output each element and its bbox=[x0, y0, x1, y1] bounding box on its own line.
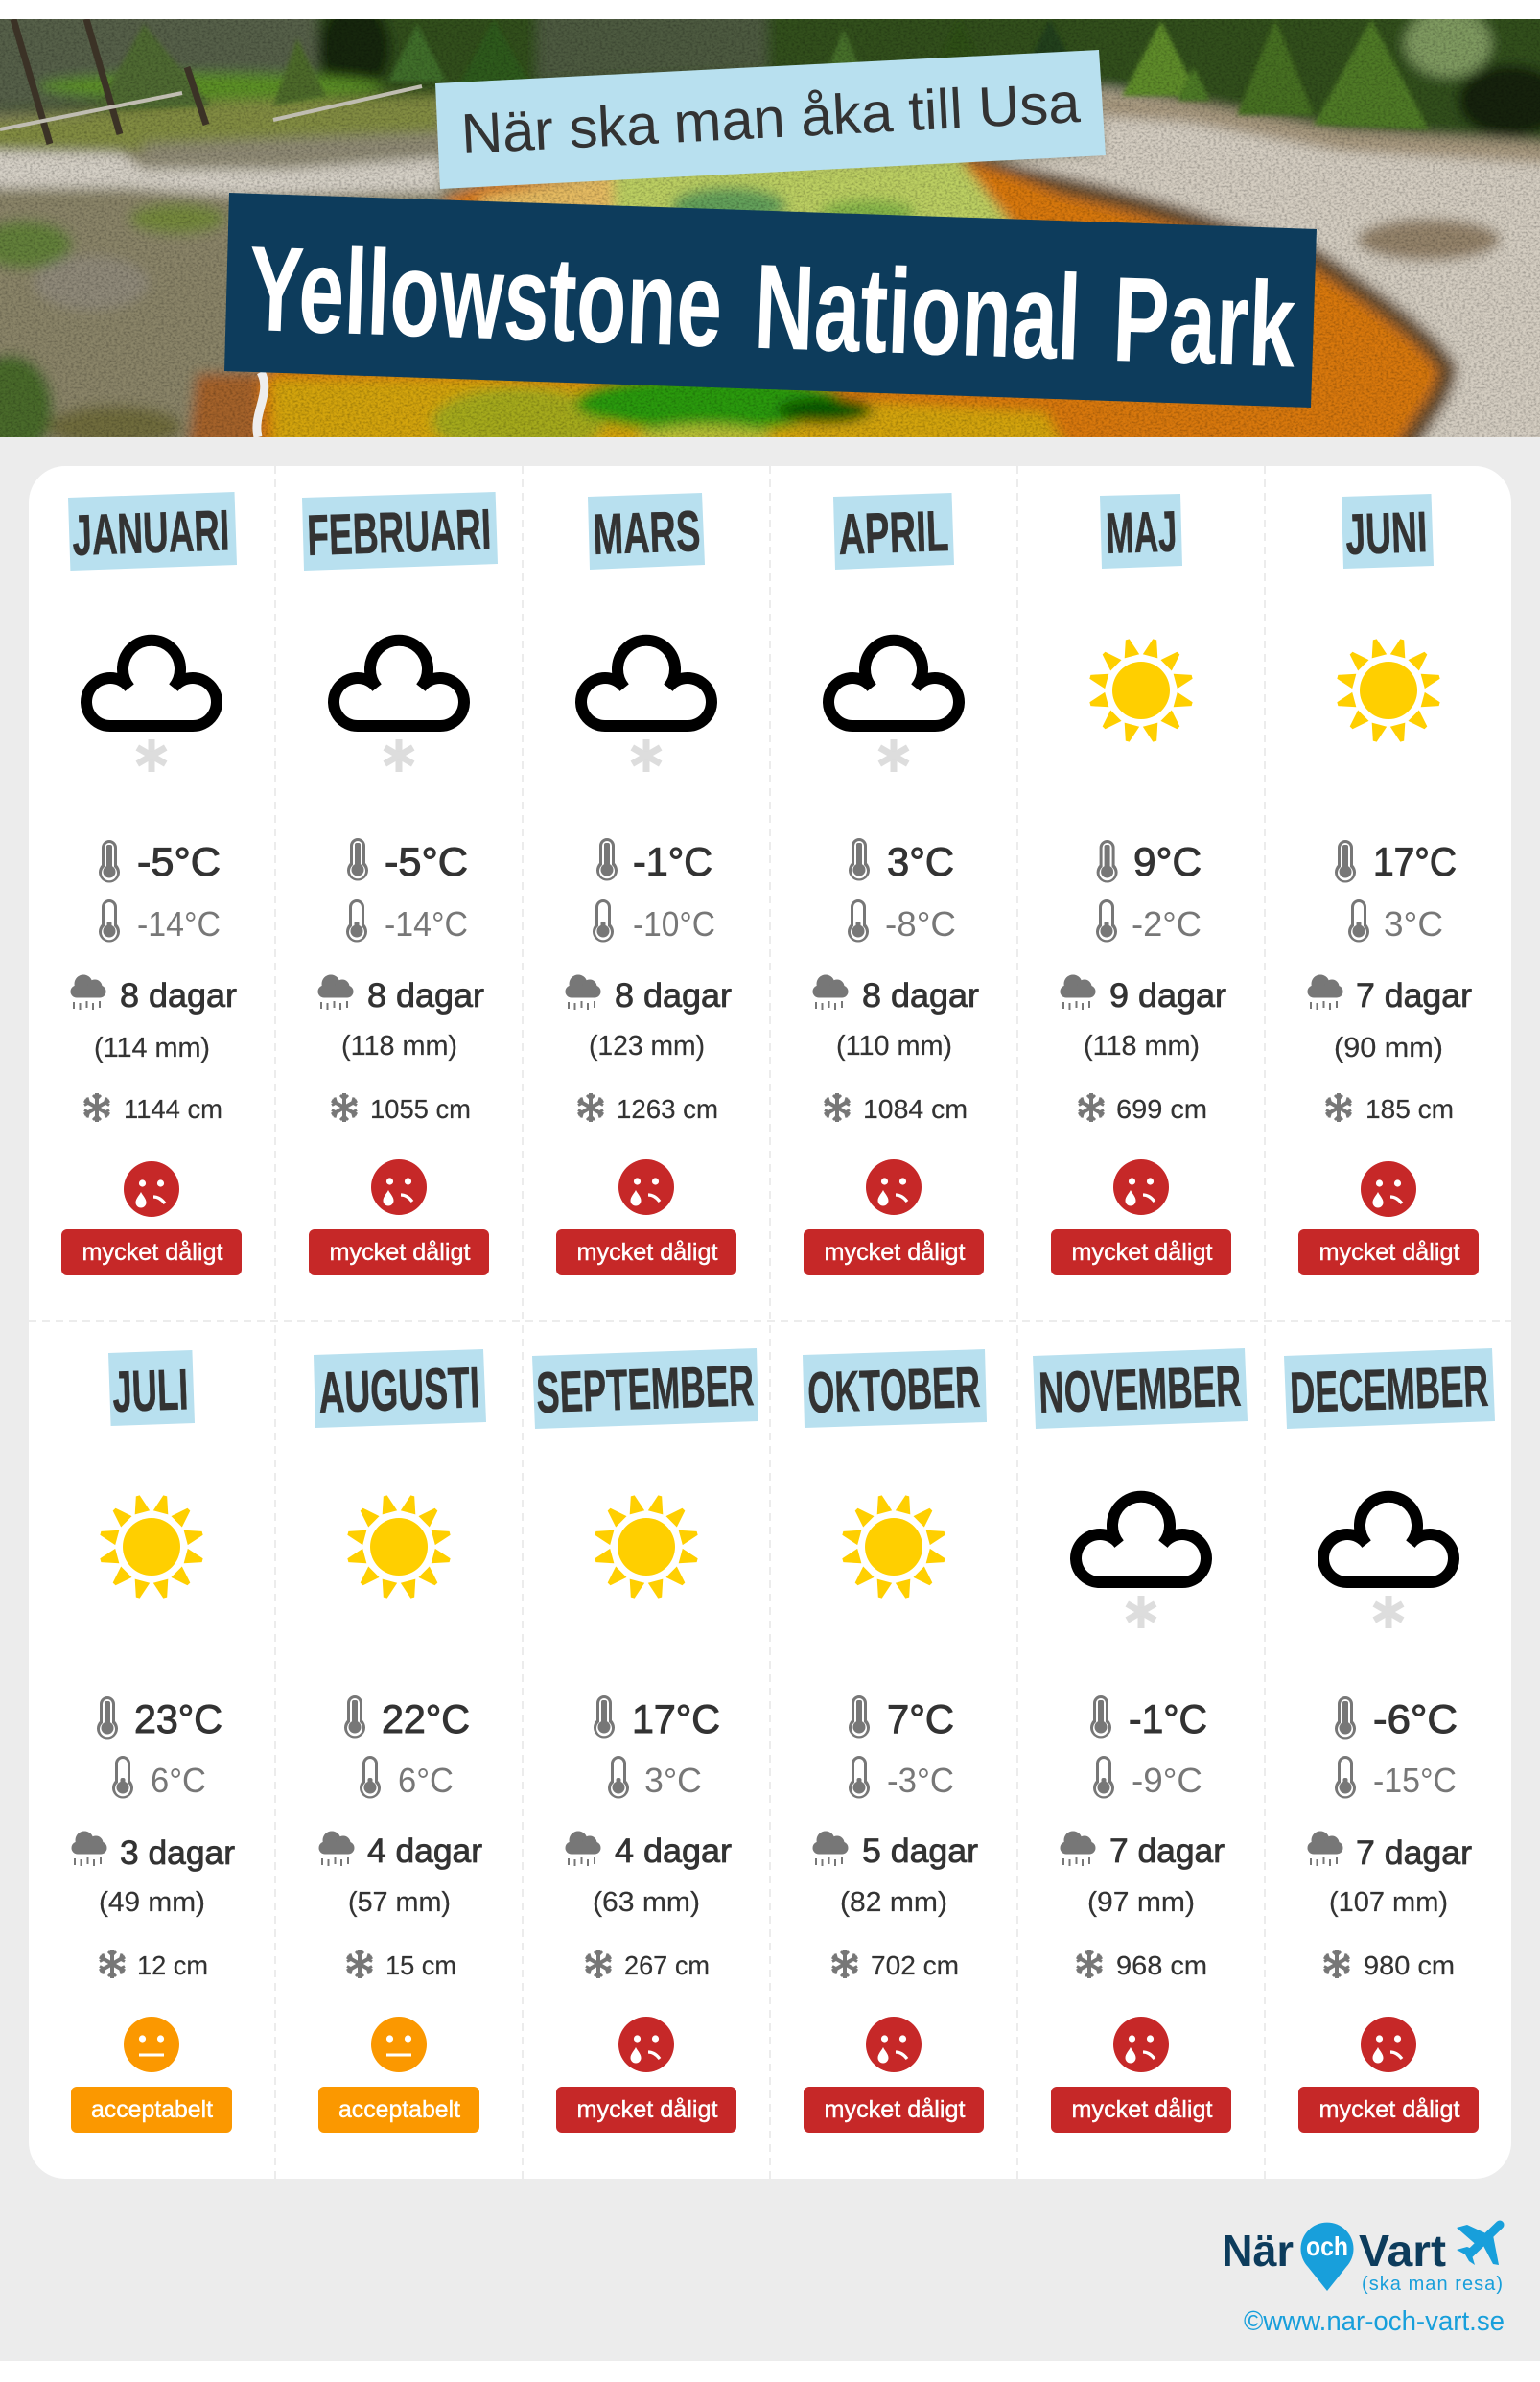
header photo: Yellowstone hot spring bbox=[0, 0, 1540, 460]
rating badge: mycket dåligt bbox=[1319, 1239, 1460, 1266]
trees bbox=[96, 19, 1429, 129]
rain days: 7 dagar bbox=[1109, 1833, 1225, 1870]
month label bbox=[108, 1350, 195, 1426]
snowfall: 185 cm bbox=[1365, 1094, 1454, 1124]
high temperature: -6°C bbox=[1373, 1696, 1458, 1741]
low temperature bbox=[849, 1756, 954, 1800]
high temperature: -5°C bbox=[137, 839, 221, 884]
logo: När och Vart: och bbox=[1306, 2231, 1348, 2261]
high temperature: 22°C bbox=[382, 1696, 470, 1741]
month label: AUGUSTI bbox=[317, 1355, 480, 1425]
high temperature bbox=[594, 1695, 720, 1741]
month label bbox=[833, 493, 954, 570]
icon: sun bbox=[99, 1494, 204, 1600]
high temperature bbox=[97, 1696, 222, 1741]
rating badge: acceptabelt bbox=[91, 2096, 213, 2123]
high temperature bbox=[1335, 1696, 1458, 1741]
high temperature: 7°C bbox=[887, 1696, 954, 1741]
rating badge: mycket dåligt bbox=[577, 2096, 718, 2123]
title text: National bbox=[753, 239, 1083, 385]
rain days: 9 dagar bbox=[1109, 977, 1226, 1015]
rain days bbox=[1061, 1832, 1225, 1870]
high temperature: 17°C bbox=[1373, 839, 1457, 884]
snowfall bbox=[347, 1950, 456, 1980]
rainfall: (110 mm) bbox=[836, 1031, 952, 1062]
icon: sad face bbox=[124, 1161, 179, 1217]
rain days: 5 dagar bbox=[862, 1833, 978, 1870]
month label: JANUARI bbox=[71, 498, 230, 568]
snowfall bbox=[332, 1093, 471, 1124]
month: februari bbox=[302, 492, 498, 1275]
icon: sad face bbox=[866, 2017, 922, 2072]
grass band bbox=[0, 96, 441, 151]
rainfall: (57 mm) bbox=[348, 1887, 451, 1918]
month: mars bbox=[556, 493, 736, 1275]
snowfall: 1144 cm bbox=[124, 1094, 222, 1124]
snowfall: 15 cm bbox=[385, 1950, 456, 1980]
snowfall bbox=[578, 1093, 718, 1124]
snowfall: 980 cm bbox=[1364, 1950, 1455, 1980]
month label bbox=[314, 1349, 486, 1428]
high temperature bbox=[1090, 1695, 1207, 1741]
month label: APRIL bbox=[837, 499, 949, 567]
snowfall bbox=[1079, 1093, 1207, 1124]
rating badge bbox=[556, 1229, 736, 1275]
high temperature bbox=[596, 838, 712, 884]
snowfall bbox=[84, 1093, 222, 1124]
high temperature: 23°C bbox=[134, 1696, 222, 1741]
rating badge: acceptabelt bbox=[338, 2096, 460, 2123]
month label bbox=[803, 1349, 987, 1428]
icon: sun bbox=[346, 1494, 452, 1600]
month: juni bbox=[1298, 494, 1479, 1275]
snowfall: 699 cm bbox=[1116, 1094, 1207, 1124]
month label: JULI bbox=[111, 1357, 189, 1424]
icon: sad face bbox=[618, 2017, 674, 2072]
month label: MAJ bbox=[1105, 499, 1178, 566]
title banner bbox=[224, 193, 1317, 408]
icon: snow cloud bbox=[1323, 1497, 1454, 1628]
high temperature: -5°C bbox=[385, 839, 468, 884]
month: oktober bbox=[803, 1349, 987, 2133]
snowfall: 12 cm bbox=[137, 1950, 208, 1980]
month: juli bbox=[71, 1350, 235, 2133]
rainfall: (123 mm) bbox=[589, 1031, 705, 1062]
rating badge bbox=[61, 1229, 242, 1275]
rating badge: mycket dåligt bbox=[825, 1239, 966, 1266]
month label bbox=[302, 492, 498, 571]
title text bbox=[246, 221, 1298, 393]
icon: sad face bbox=[371, 1159, 427, 1215]
texture bbox=[0, 19, 1540, 437]
rating badge: mycket dåligt bbox=[330, 1239, 471, 1266]
rating badge bbox=[556, 2087, 736, 2133]
snowfall bbox=[1324, 1950, 1455, 1980]
low temperature bbox=[1335, 1756, 1457, 1800]
low temperature: -10°C bbox=[633, 904, 715, 944]
low temperature bbox=[99, 899, 221, 944]
website credit: ©www.nar-och-vart.se bbox=[1244, 2306, 1505, 2337]
low temperature bbox=[593, 899, 715, 944]
rating badge: mycket dåligt bbox=[825, 2096, 966, 2123]
rating badge bbox=[71, 2087, 232, 2133]
snowfall: 1084 cm bbox=[863, 1094, 968, 1124]
rain days bbox=[813, 974, 979, 1015]
snowfall bbox=[586, 1950, 710, 1980]
rating badge bbox=[318, 2087, 479, 2133]
rain days bbox=[1308, 1832, 1472, 1872]
rainfall: (107 mm) bbox=[1329, 1887, 1448, 1918]
rain days: 7 dagar bbox=[1356, 977, 1472, 1015]
month label: JUNI bbox=[1344, 500, 1428, 567]
high temperature: 17°C bbox=[632, 1696, 720, 1741]
icon: neutral face bbox=[124, 2017, 179, 2072]
month label bbox=[1033, 1348, 1248, 1429]
low temperature: -15°C bbox=[1373, 1761, 1457, 1800]
low temperature: -3°C bbox=[887, 1761, 954, 1800]
rainfall: (118 mm) bbox=[341, 1031, 457, 1062]
icon: airplane bbox=[1457, 2225, 1500, 2265]
icon: sun bbox=[594, 1494, 699, 1600]
icon: sad face bbox=[1361, 2017, 1416, 2072]
high temperature bbox=[99, 839, 221, 884]
month label: OKTOBER bbox=[806, 1355, 981, 1425]
month: november bbox=[1033, 1348, 1248, 2133]
rating badge: mycket dåligt bbox=[1319, 2096, 1460, 2123]
rainfall: (97 mm) bbox=[1087, 1887, 1195, 1918]
rainfall: (49 mm) bbox=[99, 1887, 205, 1918]
month label bbox=[588, 493, 705, 570]
low temperature: 6°C bbox=[151, 1761, 206, 1800]
high temperature bbox=[347, 838, 468, 884]
snowfall bbox=[832, 1950, 959, 1980]
rain days bbox=[1061, 974, 1226, 1015]
month: maj bbox=[1051, 494, 1231, 1275]
icon: neutral face bbox=[371, 2017, 427, 2072]
low temperature: -9°C bbox=[1132, 1761, 1202, 1800]
month: januari bbox=[61, 492, 242, 1275]
white sinter right bbox=[964, 88, 1540, 460]
icon: snow cloud bbox=[1076, 1497, 1206, 1628]
subtitle text: När ska man åka till Usa bbox=[459, 71, 1082, 166]
snowfall bbox=[100, 1950, 208, 1980]
rain days: 3 dagar bbox=[120, 1834, 235, 1872]
rain days bbox=[813, 1832, 978, 1870]
high temperature bbox=[344, 1695, 470, 1741]
rain days: 8 dagar bbox=[615, 977, 732, 1015]
title text: Yellowstone bbox=[246, 221, 725, 372]
month label bbox=[68, 492, 237, 571]
month: december bbox=[1284, 1348, 1495, 2133]
low temperature bbox=[848, 899, 956, 944]
icon: sad face bbox=[1361, 1161, 1416, 1217]
panel: monthly climate card bbox=[29, 466, 1511, 2179]
rain days bbox=[566, 1832, 732, 1870]
rating badge bbox=[1051, 2087, 1231, 2133]
snowfall: 702 cm bbox=[871, 1950, 959, 1980]
rain days: 8 dagar bbox=[862, 977, 979, 1015]
snowfall bbox=[1077, 1950, 1207, 1980]
rain days bbox=[566, 974, 732, 1015]
month: april bbox=[804, 493, 984, 1275]
spring bbox=[251, 182, 1446, 437]
icon: sad face bbox=[1113, 1159, 1169, 1215]
low temperature: -8°C bbox=[885, 904, 956, 944]
icon: sun bbox=[1088, 638, 1194, 743]
icon: sad face bbox=[866, 1159, 922, 1215]
snowfall bbox=[1326, 1093, 1454, 1124]
month label: NOVEMBER bbox=[1038, 1354, 1242, 1425]
rating badge: mycket dåligt bbox=[1072, 2096, 1213, 2123]
rainfall: (114 mm) bbox=[94, 1033, 210, 1063]
low temperature bbox=[112, 1756, 206, 1800]
high temperature: -1°C bbox=[633, 839, 712, 884]
logo: När och Vart: Vart bbox=[1359, 2226, 1446, 2276]
rating badge bbox=[804, 1229, 984, 1275]
rain days: 8 dagar bbox=[367, 977, 484, 1015]
forest band bbox=[0, 19, 1540, 148]
low temperature bbox=[1096, 899, 1202, 944]
icon: sun bbox=[841, 1494, 946, 1600]
rating badge bbox=[1298, 2087, 1479, 2133]
icon: sad face bbox=[1113, 2017, 1169, 2072]
snowfall: 1055 cm bbox=[370, 1094, 471, 1124]
high temperature bbox=[1335, 839, 1457, 884]
logo: När och Vart: (ska man resa) bbox=[1362, 2274, 1503, 2295]
icon: snow cloud bbox=[86, 641, 217, 772]
high temperature: -1°C bbox=[1129, 1696, 1207, 1741]
month label bbox=[1100, 494, 1182, 569]
rating badge: mycket dåligt bbox=[577, 1239, 718, 1266]
rainfall: (90 mm) bbox=[1334, 1033, 1443, 1063]
lower left ground bbox=[0, 221, 72, 269]
high temperature bbox=[849, 838, 954, 884]
low temperature: -14°C bbox=[137, 904, 221, 944]
snowfall: 968 cm bbox=[1116, 1950, 1207, 1980]
title text: Park bbox=[1110, 251, 1298, 393]
rainfall: (63 mm) bbox=[593, 1887, 700, 1918]
low temperature: 3°C bbox=[644, 1761, 702, 1800]
white path left bbox=[144, 132, 441, 165]
rain days: 7 dagar bbox=[1356, 1834, 1472, 1872]
logo: När och Vart: När bbox=[1222, 2226, 1294, 2276]
rain days bbox=[71, 1832, 235, 1872]
low temperature bbox=[346, 899, 468, 944]
low temperature bbox=[1348, 899, 1443, 944]
snowfall: 267 cm bbox=[624, 1950, 710, 1980]
high temperature: 3°C bbox=[887, 839, 954, 884]
low temperature bbox=[608, 1756, 702, 1800]
snowfall: 1263 cm bbox=[617, 1094, 718, 1124]
rating badge bbox=[804, 2087, 984, 2133]
subtitle banner bbox=[435, 50, 1106, 189]
logo: När och Vart bbox=[1222, 2223, 1503, 2295]
rainfall: (118 mm) bbox=[1084, 1031, 1200, 1062]
low temperature bbox=[1093, 1756, 1202, 1800]
low temperature: -14°C bbox=[385, 904, 468, 944]
rating badge bbox=[1051, 1229, 1231, 1275]
icon: snow cloud bbox=[334, 641, 464, 772]
low temperature bbox=[360, 1756, 454, 1800]
low temperature: 3°C bbox=[1384, 904, 1443, 944]
rating badge: mycket dåligt bbox=[82, 1239, 223, 1266]
rating badge: mycket dåligt bbox=[1072, 1239, 1213, 1266]
month label bbox=[532, 1348, 758, 1429]
icon: snow cloud bbox=[828, 641, 959, 772]
month label bbox=[1342, 494, 1434, 569]
rain days bbox=[318, 974, 484, 1015]
month label: FEBRUARI bbox=[306, 497, 492, 568]
icon: sad face bbox=[618, 1159, 674, 1215]
rain days bbox=[1308, 974, 1472, 1015]
high temperature bbox=[849, 1695, 954, 1741]
rain days bbox=[71, 974, 237, 1015]
rainfall: (82 mm) bbox=[840, 1887, 947, 1918]
rain days: 4 dagar bbox=[367, 1833, 482, 1870]
low temperature: -2°C bbox=[1132, 904, 1202, 944]
rating badge bbox=[309, 1229, 489, 1275]
month label: SEPTEMBER bbox=[535, 1353, 755, 1425]
month: augusti bbox=[314, 1349, 486, 2133]
high temperature: 9°C bbox=[1133, 839, 1202, 884]
rain days bbox=[318, 1832, 482, 1870]
month: september bbox=[532, 1348, 758, 2133]
rating badge bbox=[1298, 1229, 1479, 1275]
snowfall bbox=[825, 1093, 968, 1124]
low temperature: 6°C bbox=[398, 1761, 454, 1800]
rain days: 8 dagar bbox=[120, 977, 237, 1015]
icon: sun bbox=[1336, 638, 1441, 743]
icon: snow cloud bbox=[581, 641, 712, 772]
month label: MARS bbox=[592, 499, 701, 567]
high temperature bbox=[1097, 839, 1202, 884]
rain days: 4 dagar bbox=[615, 1833, 732, 1870]
